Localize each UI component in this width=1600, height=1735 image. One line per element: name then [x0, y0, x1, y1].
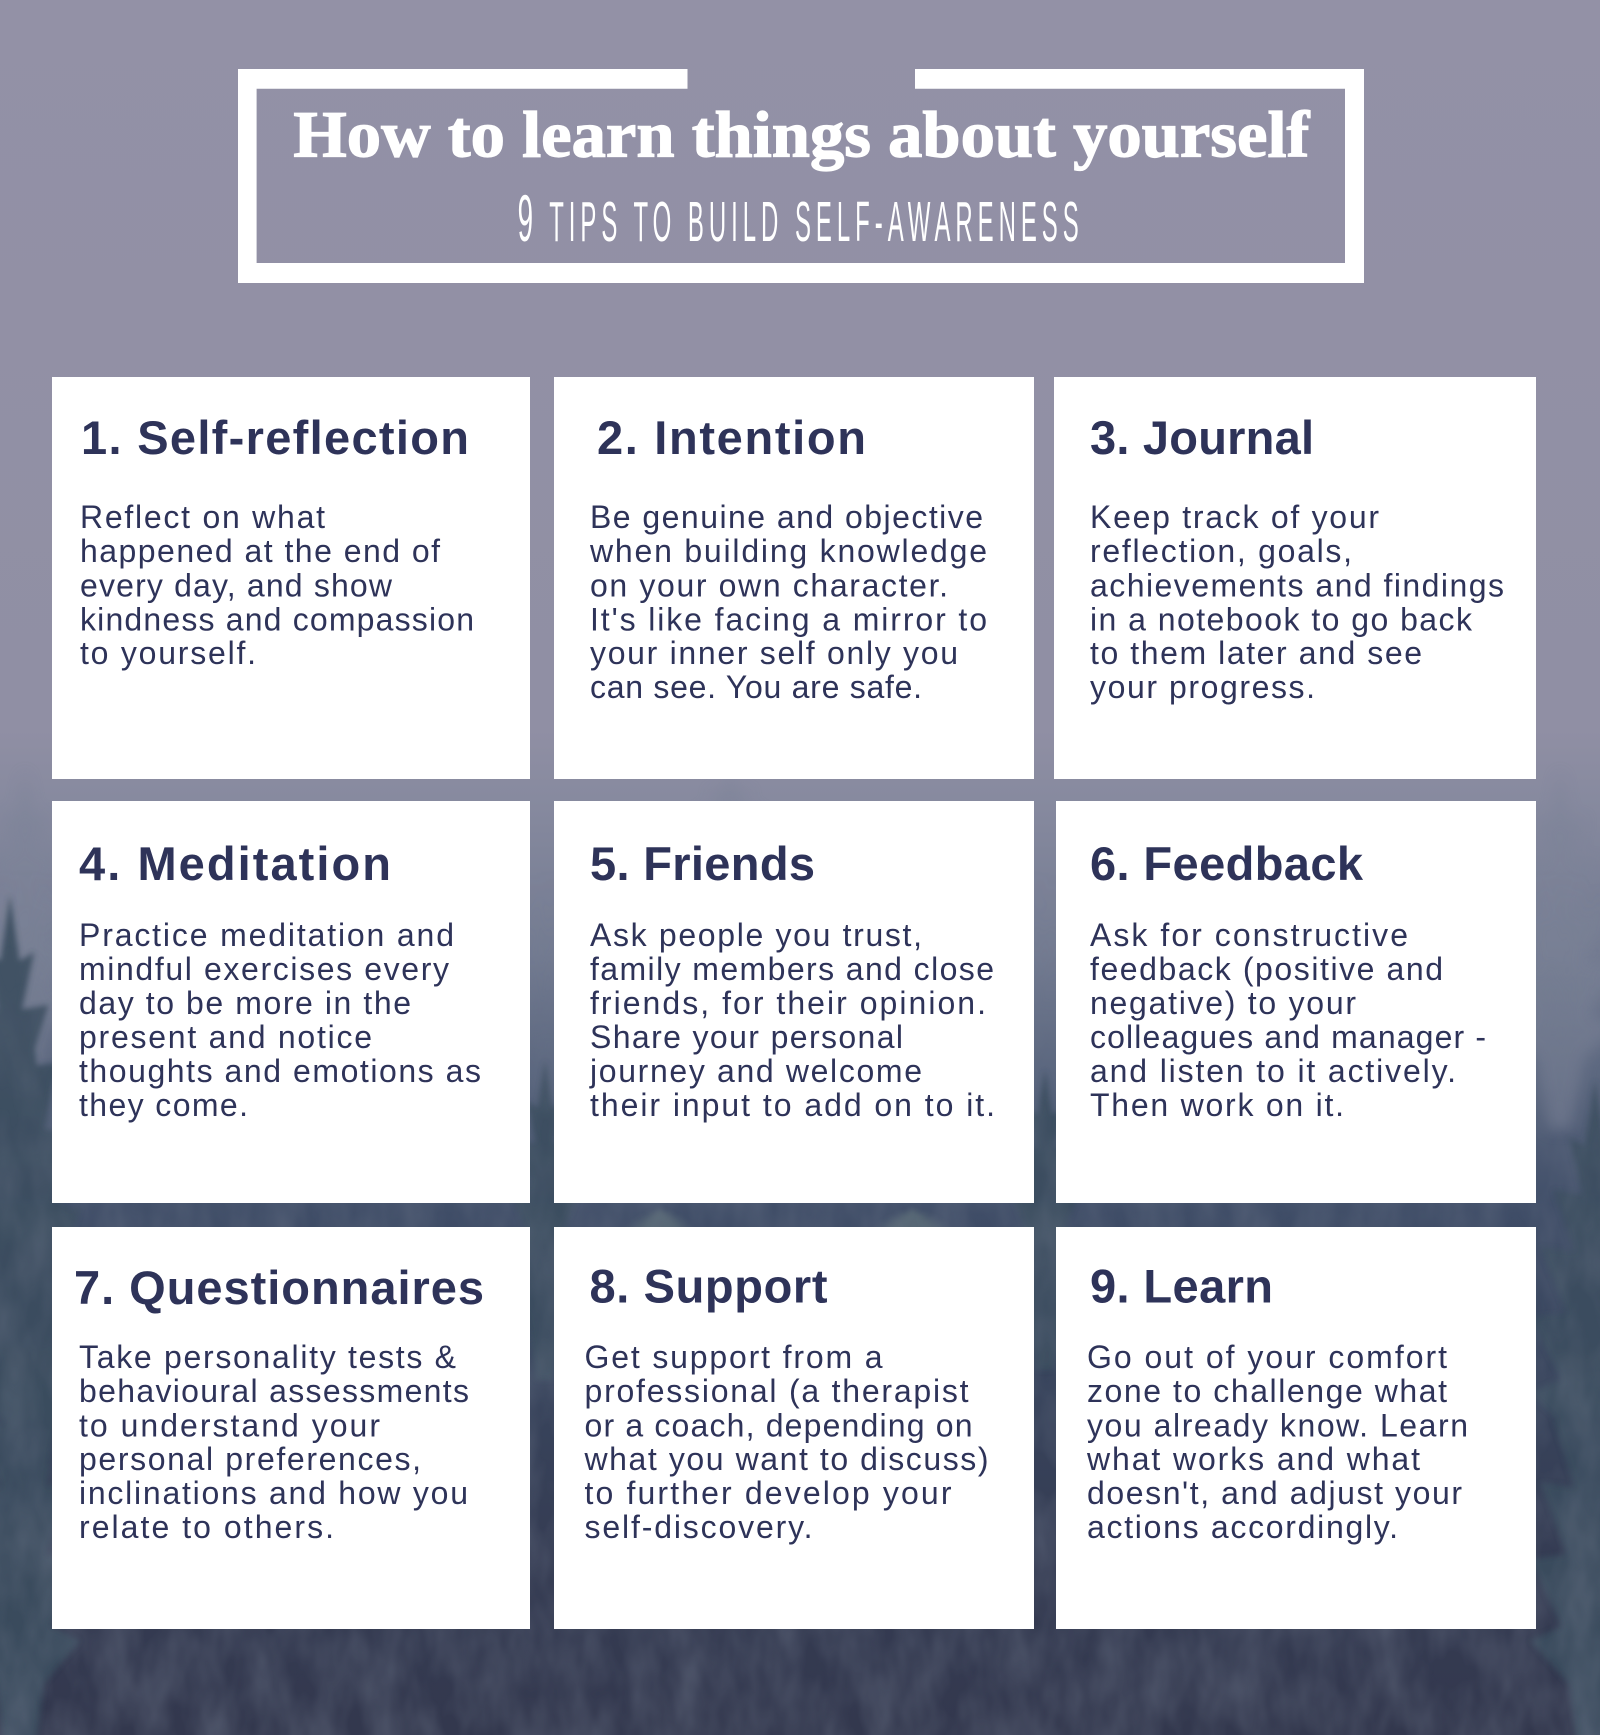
- text: Self-reflection body: Reflect on what: [80, 499, 325, 535]
- text: Self-reflection body: every day, and show: [80, 568, 393, 604]
- background: misty forest: [0, 762, 1600, 1735]
- subtitle: 9 TIPS TO BUILD SELF-AWARENESS: [518, 181, 1079, 255]
- heading: 9. Learn: 9. Learn: [1090, 1260, 1273, 1313]
- text: Support body: professional (a therapist: [584, 1373, 969, 1409]
- text: Intention body: when building knowledge: [589, 533, 987, 569]
- heading: 2. Intention: 2. Intention: [597, 411, 866, 464]
- panel: 8. Support: [554, 1227, 1034, 1629]
- text: Feedback body: and listen to it actively.: [1090, 1053, 1456, 1089]
- text: Meditation body: thoughts and emotions as: [79, 1053, 481, 1089]
- text: Self-reflection body: [80, 499, 474, 671]
- panel: 9. Learn: [1056, 1227, 1536, 1629]
- text: Friends body: family members and close: [590, 951, 994, 987]
- text: Feedback body: [1090, 917, 1486, 1123]
- text: Support body: self-discovery.: [584, 1509, 812, 1545]
- text: Friends body: Ask people you trust,: [590, 917, 922, 953]
- panel: 4. Meditation: [52, 801, 530, 1203]
- text: Learn body: actions accordingly.: [1087, 1509, 1398, 1545]
- text: Self-reflection body: kindness and compassion: [80, 602, 474, 638]
- panel: 7. Questionnaires: [52, 1227, 530, 1629]
- text: Support body: to further develop your: [584, 1475, 952, 1511]
- text: Friends body: friends, for their opinion.: [590, 985, 986, 1021]
- text: Self-reflection body: to yourself.: [80, 635, 256, 671]
- text: Journal body: in a notebook to go back: [1090, 602, 1473, 638]
- panel: 1. Self-reflection: [52, 377, 530, 779]
- text: Meditation body: Practice meditation and: [79, 917, 454, 953]
- text: Feedback body: negative) to your: [1090, 985, 1356, 1021]
- text: Support body: what you want to discuss): [584, 1441, 988, 1477]
- text: Intention body: can see. You are safe.: [590, 669, 922, 705]
- heading: 1. Self-reflection: 1. Self-reflection: [81, 411, 469, 464]
- text: Intention body: [589, 499, 987, 705]
- heading: 4. Meditation: 4. Meditation: [79, 837, 391, 890]
- text: Intention body: Be genuine and objective: [590, 499, 983, 535]
- text: Meditation body: day to be more in the: [79, 985, 411, 1021]
- panel: 3. Journal: [1054, 377, 1536, 779]
- text: Intention body: It's like facing a mirror to: [590, 602, 987, 638]
- text: Self-reflection body: happened at the end of: [80, 533, 440, 569]
- text: Intention body: your inner self only you: [590, 635, 958, 671]
- text: Friends body: [589, 917, 995, 1123]
- text: Intention body: on your own character.: [590, 568, 948, 604]
- text: Feedback body: Ask for constructive: [1090, 917, 1408, 953]
- text: Journal body: achievements and findings: [1090, 568, 1504, 604]
- text: Questionnaires body: relate to others.: [79, 1509, 334, 1545]
- panel: 5. Friends: [554, 801, 1034, 1203]
- text: Friends body: their input to add on to it.: [590, 1087, 995, 1123]
- text: Questionnaires body: inclinations and how you: [79, 1475, 468, 1511]
- text: Support body: [584, 1339, 988, 1545]
- text: Feedback body: feedback (positive and: [1090, 951, 1443, 987]
- panel: 2. Intention: [554, 377, 1034, 779]
- text: Feedback body: colleagues and manager -: [1090, 1019, 1486, 1055]
- text: Journal body: reflection, goals,: [1090, 533, 1352, 569]
- heading: 7. Questionnaires: 7. Questionnaires: [74, 1261, 484, 1314]
- text: Friends body: Share your personal: [590, 1019, 903, 1055]
- text: Support body: Get support from a: [584, 1339, 883, 1375]
- heading: 5. Friends: 5. Friends: [590, 837, 815, 890]
- text: Learn body: you already know. Learn: [1087, 1408, 1468, 1444]
- text: Journal body: [1090, 499, 1504, 705]
- text: Learn body: zone to challenge what: [1087, 1373, 1447, 1409]
- text: Journal body: your progress.: [1090, 669, 1315, 705]
- text: Journal body: Keep track of your: [1090, 499, 1379, 535]
- text: Feedback body: Then work on it.: [1090, 1087, 1344, 1123]
- title frame: [238, 69, 1364, 283]
- text: Learn body: Go out of your comfort: [1087, 1339, 1447, 1375]
- text: Questionnaires body: [79, 1339, 469, 1545]
- text: Learn body: [1086, 1339, 1468, 1545]
- text: Support body: or a coach, depending on: [584, 1408, 972, 1444]
- title: How to learn things about yourself: [293, 99, 1310, 172]
- text: Learn body: what works and what: [1086, 1441, 1420, 1477]
- heading: 8. Support: 8. Support: [590, 1260, 828, 1313]
- panel: 6. Feedback: [1056, 801, 1536, 1203]
- text: Questionnaires body: Take personality tests &: [79, 1339, 456, 1375]
- text: Meditation body: present and notice: [79, 1019, 372, 1055]
- heading: 3. Journal: 3. Journal: [1090, 411, 1314, 464]
- text: Questionnaires body: to understand your: [79, 1408, 380, 1444]
- text: Meditation body: [79, 917, 481, 1123]
- text: Questionnaires body: personal preferences,: [79, 1441, 421, 1477]
- text: Friends body: journey and welcome: [589, 1053, 922, 1089]
- text: Learn body: doesn't, and adjust your: [1087, 1475, 1462, 1511]
- text: Meditation body: they come.: [79, 1087, 248, 1123]
- text: Journal body: to them later and see: [1090, 635, 1422, 671]
- text: Meditation body: mindful exercises every: [79, 951, 449, 987]
- heading: 6. Feedback: 6. Feedback: [1090, 837, 1364, 890]
- text: Questionnaires body: behavioural assessments: [79, 1373, 469, 1409]
